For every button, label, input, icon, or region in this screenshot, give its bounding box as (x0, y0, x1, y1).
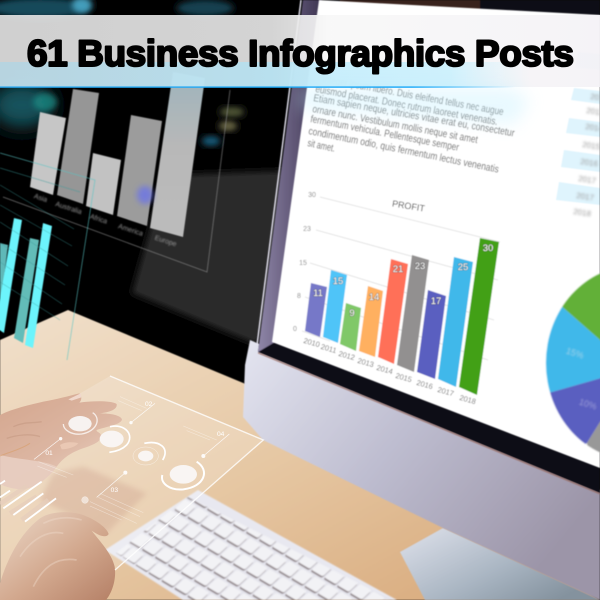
year labels: 2012 (337, 349, 356, 362)
hologram bar chart: regions: Africa (89, 213, 108, 226)
text block: lorem ipsum on screen: condimentum odio, quis fermentum lectus venenatis (307, 126, 500, 176)
table column with year rows: 2017 (578, 174, 597, 186)
bar values: 14 (369, 292, 379, 303)
glass tablet panel: 04 (217, 431, 225, 438)
lower hand (0, 512, 115, 600)
monitor screen (272, 0, 600, 480)
hologram bar chart: regions: Asia (33, 193, 48, 204)
hologram bar chart: regions (3, 72, 230, 272)
text block: lorem ipsum on screen: ornare nunc. Vestibulum mollis neque sit amet (311, 104, 479, 146)
axis labels: 8 (297, 293, 301, 300)
year labels: 2017 (436, 385, 455, 398)
blue glow under title (0, 62, 530, 125)
bar values: 21 (393, 264, 403, 275)
axis labels: 30 (308, 192, 316, 199)
bar chart: profit (293, 192, 500, 406)
text block: lorem ipsum on screen: Integer ipsum libero. Duis eleifend tellus nec augue (321, 74, 505, 118)
pink reflection on glass (40, 467, 147, 533)
monitor stand (400, 528, 600, 600)
axis labels: 0 (293, 326, 297, 333)
pie labels: 10% (578, 397, 598, 412)
text block: lorem ipsum on screen: sit amet. (306, 138, 336, 155)
axis labels: 23 (303, 226, 311, 233)
text block: lorem ipsum on screen: fermentum vehicula. Pellentesque semper (309, 114, 460, 154)
bar values: 30 (483, 243, 493, 254)
bar values: 17 (431, 296, 441, 307)
bar values: 15 (333, 276, 343, 287)
glass tablet panel: 02 (145, 401, 153, 408)
table column with year rows (556, 52, 600, 219)
table column with year rows: 2016 (580, 157, 599, 169)
monitor bezel (257, 0, 600, 494)
glass edge highlight (110, 376, 263, 570)
bar values: 9 (349, 308, 355, 319)
pie labels (565, 346, 598, 412)
table column with year rows: 2018 (573, 207, 592, 219)
bar values: 25 (458, 262, 468, 273)
hologram bar chart: regions: America (117, 223, 144, 238)
hologram bar chart: regions: Europe (154, 235, 177, 248)
hologram circles (63, 413, 204, 489)
year labels: 2018 (458, 393, 477, 406)
title: 61 Business Infographics Posts (27, 33, 574, 74)
chart title: PROFIT (391, 199, 426, 214)
table column with year rows: 2017 (576, 191, 595, 203)
blue accent line (0, 86, 515, 88)
year labels (302, 336, 477, 406)
glass tablet panel (0, 376, 263, 600)
text block: lorem ipsum on screen (306, 74, 516, 176)
pie labels: 15% (565, 346, 585, 361)
title band (0, 15, 600, 87)
bars (305, 238, 499, 395)
axis labels: 15 (299, 260, 307, 267)
hologram callouts 01 to 04 (34, 397, 229, 523)
year labels: 2015 (394, 371, 413, 384)
axis labels (293, 192, 316, 333)
bar values (313, 243, 493, 319)
year labels: 2013 (356, 356, 375, 369)
bar values: 11 (313, 288, 323, 299)
desk surface (0, 310, 600, 600)
text block: lorem ipsum on screen: Etiam sapien neque, ultricies vitae erat eu, consectetur (312, 93, 516, 139)
pie chart (545, 272, 600, 453)
glass tablet panel: 03 (111, 487, 118, 494)
keyboard (105, 490, 397, 600)
hologram bar chart: regions: Australia (54, 201, 83, 216)
hologram mini bar chart (0, 481, 56, 522)
bar values: 23 (415, 261, 425, 272)
year labels: 2010 (302, 336, 321, 349)
year labels: 2016 (415, 378, 434, 391)
hologram cyan chart (0, 153, 95, 360)
text block: lorem ipsum on screen: euismod placerat. Donec rutrum laoreet venenatis. (314, 84, 498, 128)
upper hand (0, 393, 122, 489)
monitor body (243, 340, 600, 600)
year labels: 2011 (320, 342, 338, 355)
glass tablet panel: 01 (45, 450, 53, 457)
year labels: 2014 (375, 363, 394, 376)
